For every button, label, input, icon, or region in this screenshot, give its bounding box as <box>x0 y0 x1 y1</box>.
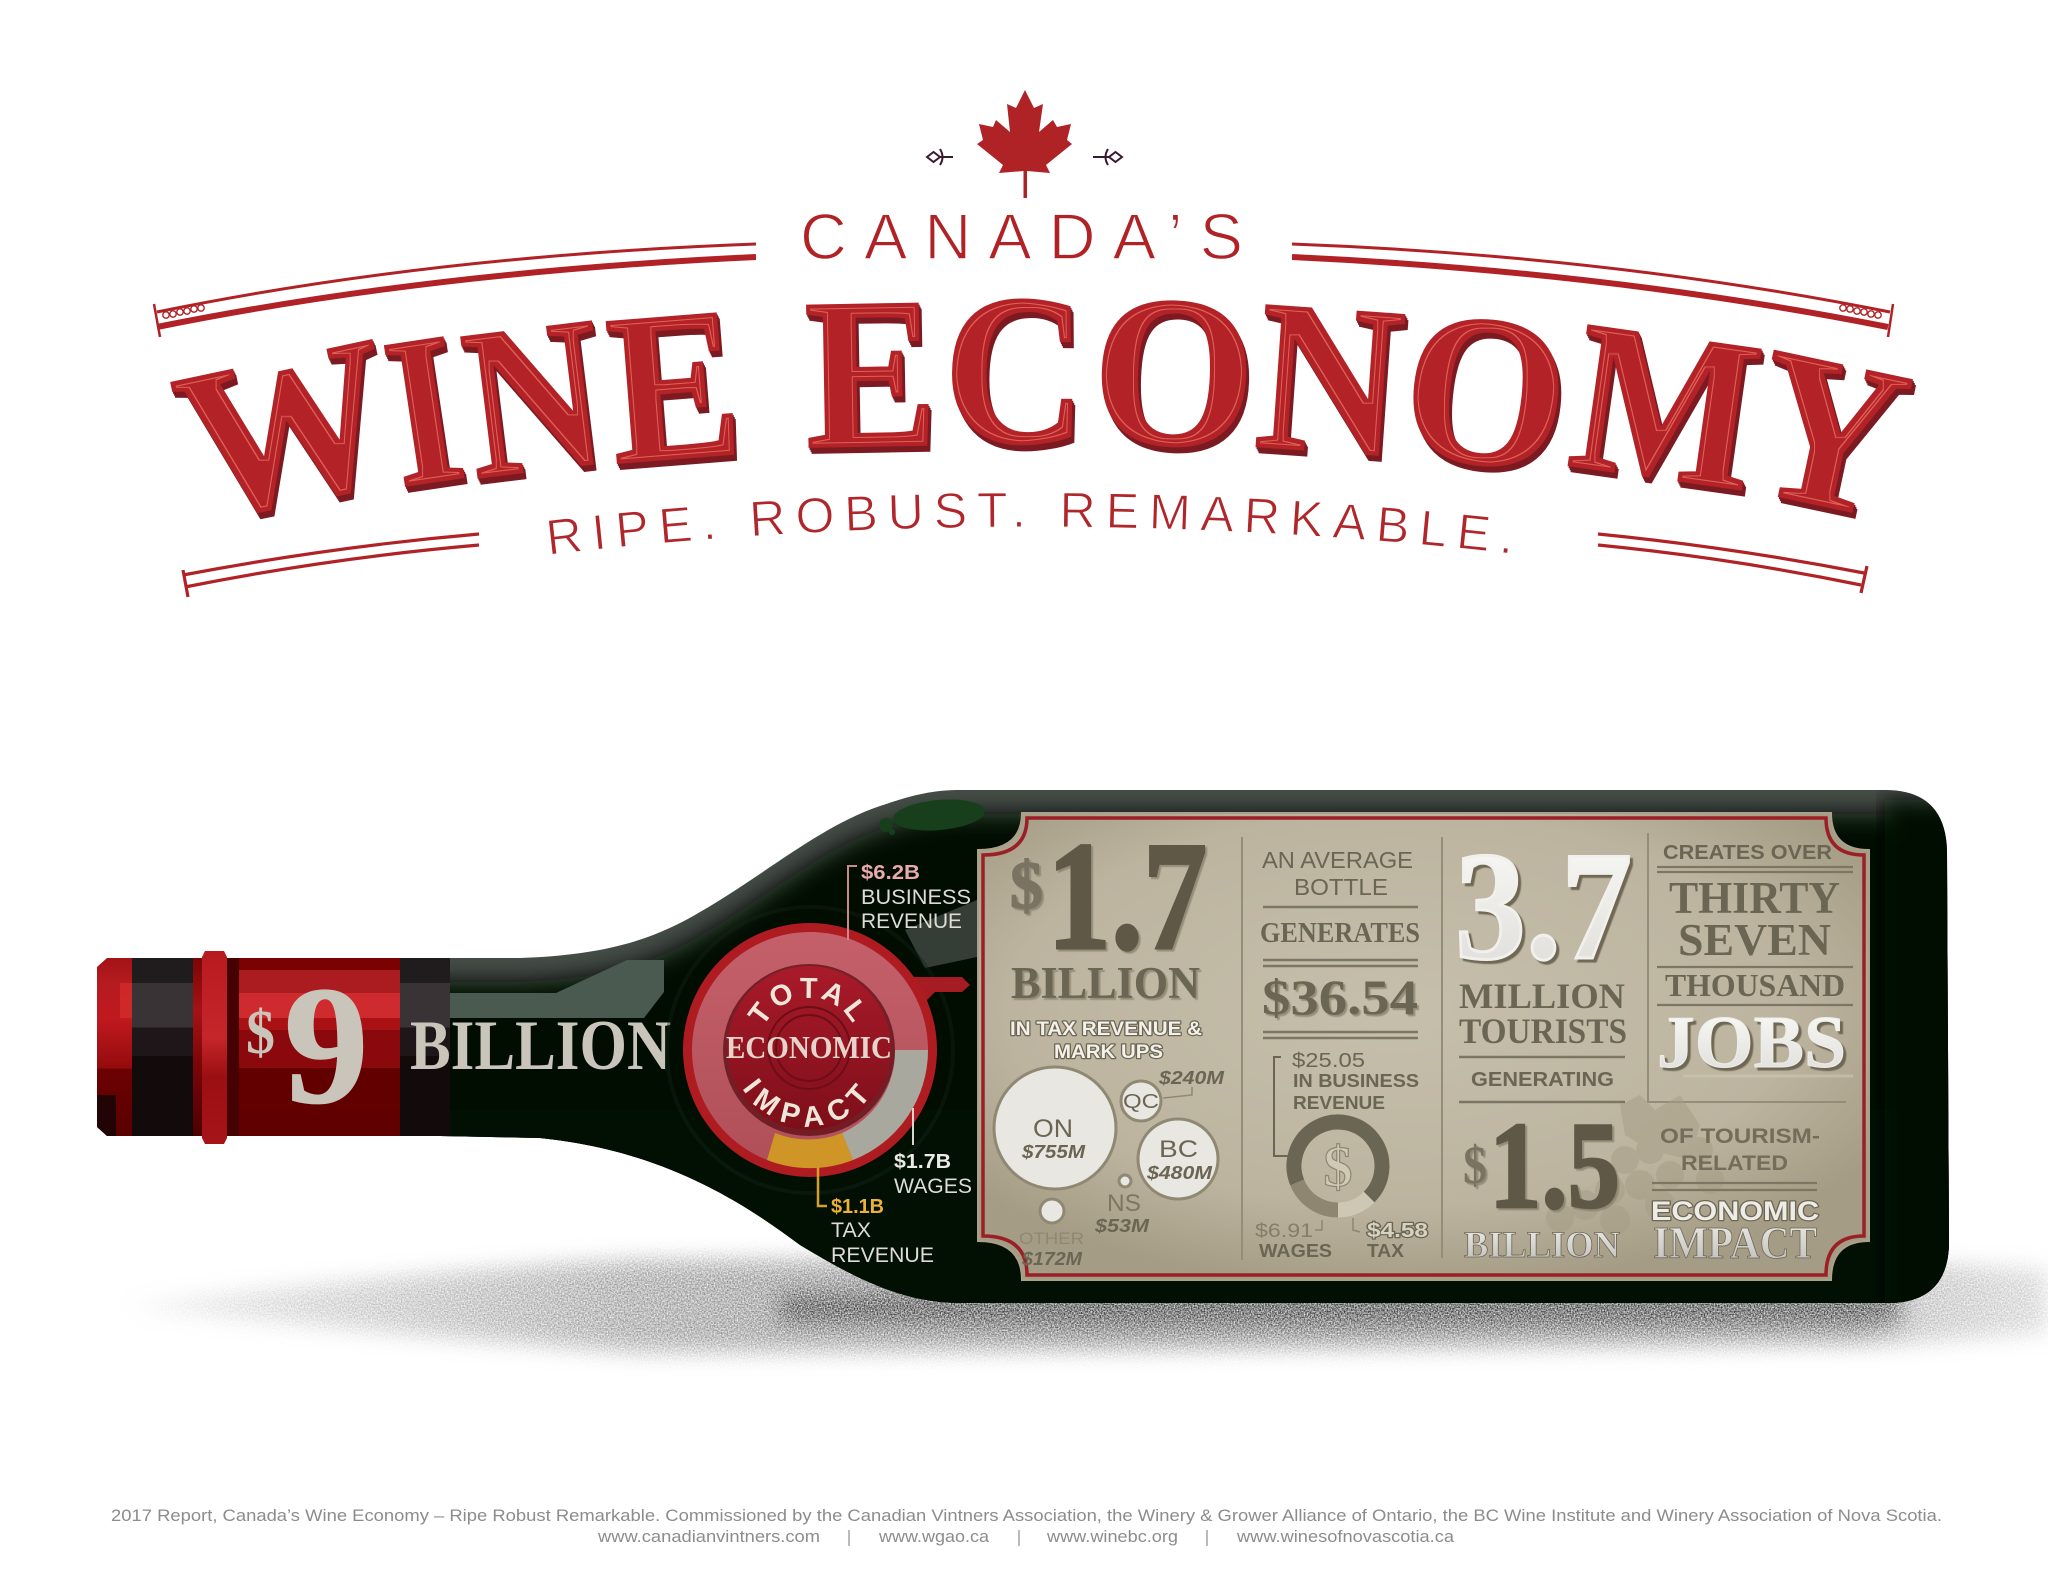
jobs count: THIRTY <box>1669 873 1840 923</box>
bubble chart: provinces: BC <box>1159 1136 1198 1163</box>
rules <box>1263 907 1418 1038</box>
label paper <box>978 813 1869 1280</box>
headline total: $9 billion: 9 <box>284 951 368 1139</box>
neck highlight <box>450 960 664 1018</box>
heading: Wine Economy: E <box>803 253 939 493</box>
tagline: RIPE. ROBUST. REMARKABLE. <box>548 493 1508 554</box>
footer: www.canadianvintners.com <box>597 1527 820 1546</box>
bubble chart: provinces: QC <box>1123 1091 1159 1113</box>
donut chart: dollar split: $ <box>1324 1134 1352 1199</box>
million tourists <box>1459 976 1627 1051</box>
tax total: BILLION <box>1011 958 1200 1008</box>
wages and tax labels: $6.91 <box>1255 1221 1313 1242</box>
label red border <box>983 818 1864 1275</box>
heading: Wine Economy <box>158 249 1926 568</box>
segment: wages <box>842 1050 928 1160</box>
column 4: jobs: IMPACT <box>1653 1218 1817 1268</box>
callout: tax revenue: TAX <box>831 1219 871 1242</box>
bubble chart: provinces: $755M <box>1021 1142 1086 1162</box>
decorative rules: upper right <box>1292 244 1893 337</box>
generating: GENERATING <box>1471 1069 1614 1091</box>
business revenue share: REVENUE <box>1293 1093 1385 1113</box>
column 3: tourists <box>1455 820 1632 1266</box>
wages and tax labels: $4.58 <box>1367 1220 1428 1242</box>
footer: www.wgao.ca <box>878 1527 990 1546</box>
business revenue share: IN BUSINESS <box>1293 1071 1419 1091</box>
headline total: $9 billion <box>246 951 671 1139</box>
bottle heading: BOTTLE <box>1294 874 1388 900</box>
callout: tax revenue <box>818 1167 934 1267</box>
donut chart: dollar split <box>1294 1122 1382 1210</box>
pointer arrow <box>900 977 970 1012</box>
bottle glass body <box>441 790 1949 1303</box>
segment: tax revenue <box>767 1133 853 1168</box>
billion: BILLION <box>1464 1225 1620 1266</box>
jobs count: SEVEN <box>1678 915 1831 965</box>
creates over: CREATES OVER <box>1663 842 1833 864</box>
callout: wages <box>894 1108 972 1198</box>
icon: right flourish <box>1093 149 1122 165</box>
column 2: average bottle <box>1255 847 1428 1261</box>
heading: Wine Economy: W <box>158 291 414 568</box>
callout: business revenue: REVENUE <box>861 910 962 933</box>
icon: maple leaf <box>977 90 1072 198</box>
segment: business revenue <box>692 932 928 1168</box>
bottle heading <box>1262 847 1413 900</box>
heading: Wine Economy: C <box>943 250 1087 489</box>
bubble chart: provinces: ON <box>1033 1115 1073 1143</box>
rules <box>1652 867 1853 1190</box>
column 1: tax revenue <box>994 810 1225 1269</box>
heading: Wine Economy: N <box>452 271 616 524</box>
center medallion: IMPACT <box>743 1078 867 1128</box>
tax total <box>1010 810 1207 1008</box>
bubble chart: provinces: $53M <box>1094 1216 1150 1236</box>
icon: left flourish <box>927 149 953 165</box>
bottle capsule <box>97 951 450 1144</box>
tax subheading: IN TAX REVENUE & <box>1010 1019 1202 1040</box>
tourism related: RELATED <box>1681 1152 1788 1175</box>
million tourists: TOURISTS <box>1459 1011 1627 1051</box>
callout: business revenue: BUSINESS <box>861 886 971 909</box>
bottle value: $36.54 <box>1262 969 1418 1025</box>
title lockup <box>152 90 1926 598</box>
heading: Wine Economy: E <box>600 263 748 510</box>
heading: Wine Economy: O <box>1393 263 1579 518</box>
tourism related: OF TOURISM- <box>1660 1125 1820 1148</box>
column 4: jobs <box>1651 842 1853 1268</box>
tax total: 1.7 <box>1047 810 1207 982</box>
tax subheading: MARK UPS <box>1054 1042 1163 1063</box>
tourism impact value: $ <box>1463 1135 1487 1195</box>
heading: Canada's: CANADA’S <box>800 200 1243 273</box>
icon: air bubble <box>879 796 986 835</box>
callout: tax revenue: $1.1B <box>831 1196 884 1218</box>
decorative rules: lower right <box>1598 534 1867 593</box>
heading: Wine Economy: I <box>372 286 476 532</box>
tax subheading <box>1010 1019 1202 1063</box>
heading: Wine Economy: Y <box>1732 302 1926 565</box>
generates: GENERATES <box>1260 918 1420 949</box>
headline total: $9 billion: BILLION <box>410 1007 671 1085</box>
footer: www.winebc.org <box>1046 1527 1178 1546</box>
footer: www.winesofnovascotia.ca <box>1236 1527 1455 1546</box>
tourism related <box>1660 1125 1820 1175</box>
bubble chart: provinces <box>994 1067 1225 1269</box>
bottle heading: AN AVERAGE <box>1262 847 1413 873</box>
wine bottle <box>97 790 1949 1303</box>
jobs count: THOUSAND <box>1665 967 1845 1003</box>
wages and tax labels: TAX <box>1367 1241 1404 1261</box>
headline total: $9 billion: $ <box>246 999 275 1067</box>
callout: business revenue: $6.2B <box>861 862 920 884</box>
wages and tax labels: WAGES <box>1259 1241 1332 1261</box>
heading: Wine Economy: O <box>1089 249 1259 493</box>
heading: Wine Economy: N <box>1250 255 1410 502</box>
center medallion <box>726 966 892 1130</box>
rules <box>1459 1057 1625 1102</box>
bubble chart: provinces: OTHER <box>1019 1229 1084 1248</box>
label panel <box>978 810 1869 1280</box>
wages and tax labels <box>1255 1218 1428 1261</box>
ground shadow <box>125 1260 2048 1352</box>
jobs: JOBS <box>1657 1002 1846 1084</box>
callout: wages: $1.7B <box>894 1151 951 1173</box>
decorative rules: lower left <box>183 534 479 597</box>
bubble chart: provinces: NS <box>1107 1190 1141 1217</box>
tourism impact value: 1.5 <box>1489 1097 1620 1234</box>
donut chart: total economic impact <box>665 905 970 1177</box>
callout: wages: WAGES <box>894 1175 972 1198</box>
jobs count <box>1665 873 1845 1003</box>
center medallion: TOTAL <box>746 978 862 1023</box>
footer: 2017 Report, Canada’s Wine Economy – Ripe Robust Remarkable. Commissioned by the Canadian Vintners Association, the Winery & Grower Alliance of Ontario, the BC Wine Institute and Winery Association of Nova Scotia. <box>111 1506 1942 1525</box>
heading: Wine Economy: M <box>1559 276 1773 537</box>
center medallion: ECONOMIC <box>726 1029 892 1065</box>
callout: business revenue <box>848 862 971 940</box>
tourist count: 3.7 <box>1455 820 1632 992</box>
column dividers <box>1242 833 1846 1260</box>
economic impact: ECONOMIC <box>1651 1196 1819 1226</box>
footer <box>111 1506 1942 1546</box>
bubble chart: provinces: $480M <box>1146 1163 1213 1183</box>
decorative rules: upper left <box>154 244 756 337</box>
bubble chart: provinces: $240M <box>1158 1068 1225 1088</box>
decoration: grapes watermark <box>1546 1095 1724 1235</box>
bubble chart: provinces: $172M <box>1021 1249 1083 1269</box>
million tourists: MILLION <box>1459 976 1625 1016</box>
business revenue share: $25.05 <box>1292 1050 1365 1072</box>
tax total: $ <box>1010 847 1043 923</box>
shoulder highlight <box>905 900 977 968</box>
business revenue share <box>1274 1050 1419 1156</box>
callout: tax revenue: REVENUE <box>831 1244 934 1267</box>
